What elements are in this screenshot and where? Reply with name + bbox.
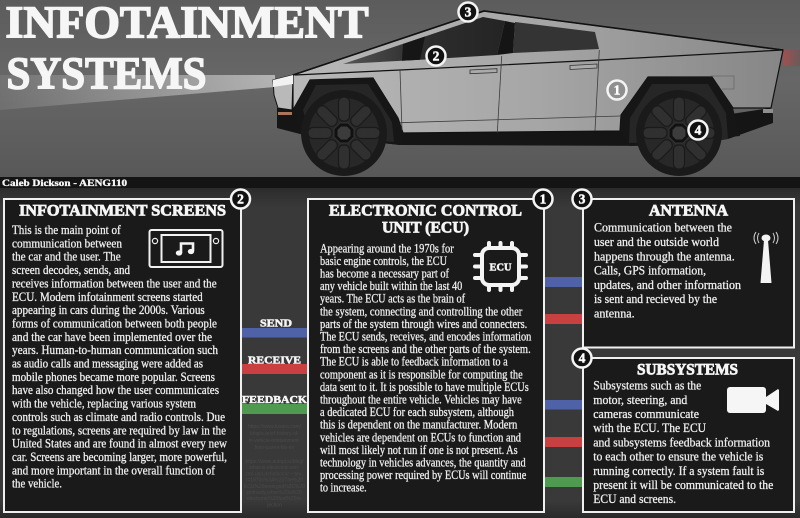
body text: to increase. bbox=[320, 480, 367, 495]
body text: updates, and other information bbox=[594, 277, 741, 292]
connector bars: left gap bbox=[241, 328, 307, 414]
body text: forms of communication between both people bbox=[12, 316, 217, 330]
body text: any vehicle built within the last 40 bbox=[320, 278, 462, 293]
body text: to each other to ensure the vehicle is bbox=[593, 449, 763, 464]
number badge 2: 2 bbox=[237, 192, 244, 206]
body text: running correctly. If a system fault is bbox=[593, 463, 764, 478]
body text: and the car have been implemented over the bbox=[12, 329, 212, 344]
hero background bbox=[0, 0, 800, 177]
number badge 1: 1 bbox=[540, 192, 547, 206]
body text: cameras communicate bbox=[593, 406, 699, 421]
icon: ECU chip bbox=[475, 243, 526, 290]
door handles bbox=[470, 64, 597, 74]
car underbody bbox=[277, 108, 773, 146]
car marker 1: 1 bbox=[614, 82, 621, 98]
icon: antenna tower bbox=[754, 232, 778, 283]
source citations: t=1970s%3A%20The%20 bbox=[246, 478, 303, 484]
number badge 3 bbox=[572, 190, 592, 208]
source citations: what-is-electronic-con- bbox=[249, 465, 300, 471]
body text: years. The ECU acts as the brain of bbox=[320, 291, 466, 306]
body text: will most likely not run if one is not present. As bbox=[320, 442, 518, 457]
body text: as audio calls and messaging were added as bbox=[12, 356, 203, 370]
body text: Calls, GPS information, bbox=[594, 262, 706, 278]
body text: throughout the entire vehicle. Vehicles may have bbox=[320, 392, 522, 406]
connector bars: right gap bbox=[545, 277, 582, 487]
body text: parts of the system through wires and connecters. bbox=[320, 316, 527, 331]
heading bbox=[329, 202, 522, 236]
car marker 3: 3 bbox=[465, 4, 472, 20]
number badge 1 bbox=[534, 190, 552, 208]
icon: ECU chip: ECU bbox=[490, 262, 512, 274]
panel: electronic control unit bbox=[308, 190, 552, 512]
body text: the car and the user. The bbox=[12, 249, 121, 264]
body text: appearing in cars during the 2000s. Various bbox=[12, 302, 205, 317]
body text: Appearing around the 1970s for bbox=[320, 240, 454, 255]
legend label: feedback: FEEDBACK bbox=[242, 394, 307, 406]
source citations: ECU%20emerged%2C%20 bbox=[244, 484, 305, 490]
source citations: trol-unit-definition/#:~:tex- bbox=[246, 471, 303, 477]
car marker 4 bbox=[688, 120, 708, 140]
source citations bbox=[244, 424, 305, 508]
lower background bbox=[0, 188, 800, 518]
source citations: in-vehicle-infotainment- bbox=[249, 438, 301, 444]
headlight lens bbox=[273, 75, 293, 87]
front wheel arch bbox=[293, 78, 403, 145]
panel frame bbox=[4, 199, 241, 512]
car marker 4: 4 bbox=[695, 122, 702, 138]
panel: infotainment screens bbox=[4, 190, 250, 512]
rear wheel bbox=[636, 90, 722, 176]
tail light glow bbox=[783, 50, 800, 66]
title: SYSTEMS bbox=[6, 48, 206, 98]
source citations: jection bbox=[266, 502, 282, 508]
body text: user and the outside world bbox=[594, 234, 719, 249]
rear arch liner bbox=[629, 84, 728, 143]
panel frame bbox=[583, 358, 794, 512]
legend label: send: SEND bbox=[260, 318, 292, 330]
heading: UNIT (ECU) bbox=[382, 219, 469, 236]
amber lamp bbox=[278, 112, 292, 115]
body text: the system, connecting and controlling the other bbox=[320, 303, 523, 318]
door seams bbox=[400, 50, 620, 133]
body text: basic engine controls, the ECU bbox=[320, 253, 447, 268]
body text: this is dependent on the manufacturer. Modern bbox=[320, 417, 518, 432]
number badge 2 bbox=[231, 190, 250, 208]
legend label: receive: RECEIVE bbox=[248, 354, 301, 366]
body text: The ECU sends, receives, and encodes information bbox=[320, 328, 532, 344]
belt line bbox=[295, 50, 783, 75]
front wheel bbox=[301, 90, 387, 176]
front arch liner bbox=[303, 84, 394, 142]
number badge 3: 3 bbox=[579, 192, 586, 206]
body text: mobile phones became more popular. Screens bbox=[12, 369, 215, 384]
roof outline bbox=[293, 11, 783, 75]
body text: car. Screens are becoming larger, more powerful, bbox=[12, 449, 227, 464]
heading: INFOTAINMENT SCREENS bbox=[19, 202, 226, 219]
headlight bbox=[273, 75, 293, 110]
body text: the vehicle. bbox=[12, 476, 62, 491]
panel: subsystems bbox=[572, 348, 794, 512]
source citations: blog/a-brief-history-of- bbox=[250, 431, 299, 437]
body text: a dedicated ECU for each subsystem, although bbox=[320, 404, 514, 419]
rear side window bbox=[513, 22, 599, 53]
body text: and more important in the overall function of bbox=[12, 462, 216, 477]
body text: component as it is responsible for computing the bbox=[320, 366, 523, 381]
body text: This is the main point of bbox=[12, 222, 121, 237]
body text: screen decodes, sends, and bbox=[12, 262, 130, 277]
body text: and subsystems feedback information bbox=[593, 434, 770, 449]
rear quarter panel bbox=[711, 76, 734, 89]
source citations: https://www.autopi.io/blog/ bbox=[245, 459, 304, 465]
front side window bbox=[343, 17, 505, 64]
body text: communication between bbox=[12, 235, 122, 250]
body text: The ECU is able to feedback information to a bbox=[320, 354, 508, 369]
rear step bbox=[763, 109, 773, 113]
source citations: how-tuxera-fits-in/ bbox=[255, 445, 295, 451]
car marker 3 bbox=[458, 2, 478, 22]
body text: ECU. Modern infotainment screens started bbox=[12, 289, 203, 304]
body text: controls such as climate and radio controls. Due bbox=[12, 409, 225, 424]
headlight beam bbox=[0, 75, 275, 110]
body text: technology in vehicles advances, the quantity and bbox=[320, 454, 526, 470]
source citations: primarily,when%20a%20 bbox=[247, 490, 302, 496]
body text: motor, steering, and bbox=[593, 392, 688, 407]
heading: ANTENNA bbox=[649, 202, 728, 219]
body text: United States and are found in almost every new bbox=[12, 436, 228, 451]
heading: SUBSYSTEMS bbox=[637, 362, 738, 378]
body text: to regulations, screens are required by law in the bbox=[12, 422, 226, 437]
body text: antenna. bbox=[594, 305, 635, 320]
body text bbox=[594, 220, 741, 320]
title bbox=[6, 0, 368, 98]
icon: infotainment screen with music note bbox=[150, 230, 222, 267]
body text: Subsystems such as the bbox=[593, 378, 701, 393]
body text: with the ECU. The ECU bbox=[593, 420, 707, 435]
body text: from the screens and the other parts of the system. bbox=[320, 341, 531, 356]
number badge 4: 4 bbox=[579, 350, 586, 366]
car marker 2 bbox=[426, 46, 446, 66]
footer band bbox=[0, 177, 800, 188]
body text: Communication between the bbox=[594, 220, 732, 235]
source citations: electronic%20fuel%20in- bbox=[247, 496, 302, 502]
body text: vehicles are dependent on ECUs to function and bbox=[320, 429, 521, 444]
car marker 1 bbox=[608, 80, 626, 100]
body text: data sent to it. It is possible to have multiple ECUs bbox=[320, 379, 529, 394]
author credit: Caleb Dickson - AENG110 bbox=[2, 179, 127, 189]
body text: years. Human-to-human communication such bbox=[12, 342, 218, 357]
body text bbox=[12, 222, 228, 491]
heading: ELECTRONIC CONTROL bbox=[329, 202, 522, 219]
car illustration bbox=[273, 11, 783, 176]
door pillar bbox=[497, 21, 515, 55]
panel: antenna bbox=[572, 190, 794, 348]
body text: is sent and recieved by the bbox=[594, 291, 717, 306]
car marker 2: 2 bbox=[433, 48, 440, 64]
panel frame bbox=[308, 199, 544, 512]
front window pillar bbox=[402, 36, 425, 61]
panel frame bbox=[583, 199, 794, 348]
body text: happens through the antenna. bbox=[594, 248, 735, 263]
car upper body bbox=[293, 11, 783, 133]
source citations: https://www.tuxera.com/ bbox=[248, 424, 302, 430]
rear wheel arch bbox=[620, 77, 740, 146]
body text: have also changed how the user communicates bbox=[12, 382, 219, 397]
body text: present it will be communicated to the bbox=[593, 477, 774, 492]
body text: has become a necessary part of bbox=[320, 266, 450, 280]
body text: ECU and screens. bbox=[593, 491, 676, 506]
body text: processing power required by ECUs will continue bbox=[320, 467, 526, 482]
body text bbox=[320, 240, 532, 495]
number badge 4 bbox=[572, 348, 592, 368]
body text bbox=[593, 378, 774, 506]
icon: video camera bbox=[727, 387, 779, 413]
body text: receives information between the user and the bbox=[12, 275, 217, 290]
body text: with the vehicle, replacing various system bbox=[12, 396, 196, 411]
